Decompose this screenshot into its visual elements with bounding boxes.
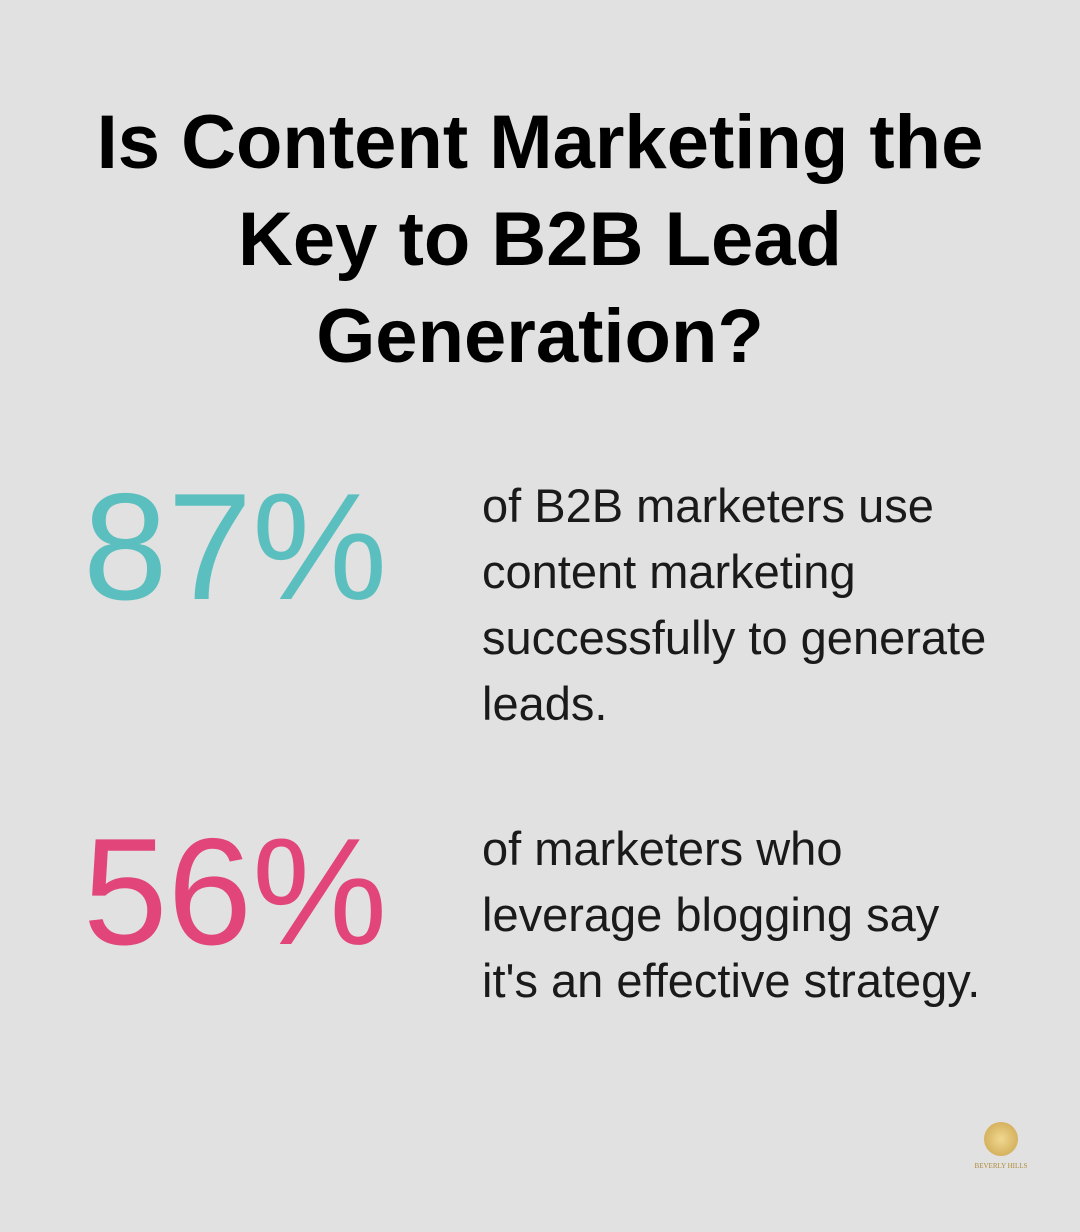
- description 56%: leverage blogging say: [482, 888, 939, 941]
- description 56%: of marketers who: [482, 822, 842, 875]
- description 87%: leads.: [482, 677, 607, 730]
- stat: 56%: [83, 807, 980, 1007]
- title: [97, 100, 983, 379]
- stat: 87%: [83, 462, 986, 730]
- description 56%: [482, 822, 980, 1007]
- description 87%: [482, 479, 986, 730]
- title: Generation?: [316, 294, 764, 379]
- title: Is Content Marketing the: [97, 100, 983, 185]
- number 87%: 87%: [83, 462, 387, 632]
- description 56%: it's an effective strategy.: [482, 954, 980, 1007]
- title: Key to B2B Lead: [238, 197, 842, 282]
- logo: [974, 1122, 1027, 1170]
- description 87%: content marketing: [482, 545, 856, 598]
- description 87%: successfully to generate: [482, 611, 986, 664]
- logo text: BEVERLY HILLS: [975, 1162, 1027, 1170]
- icon: gold medallion: [984, 1122, 1018, 1156]
- description 87%: of B2B marketers use: [482, 479, 934, 532]
- number 56%: 56%: [83, 807, 387, 977]
